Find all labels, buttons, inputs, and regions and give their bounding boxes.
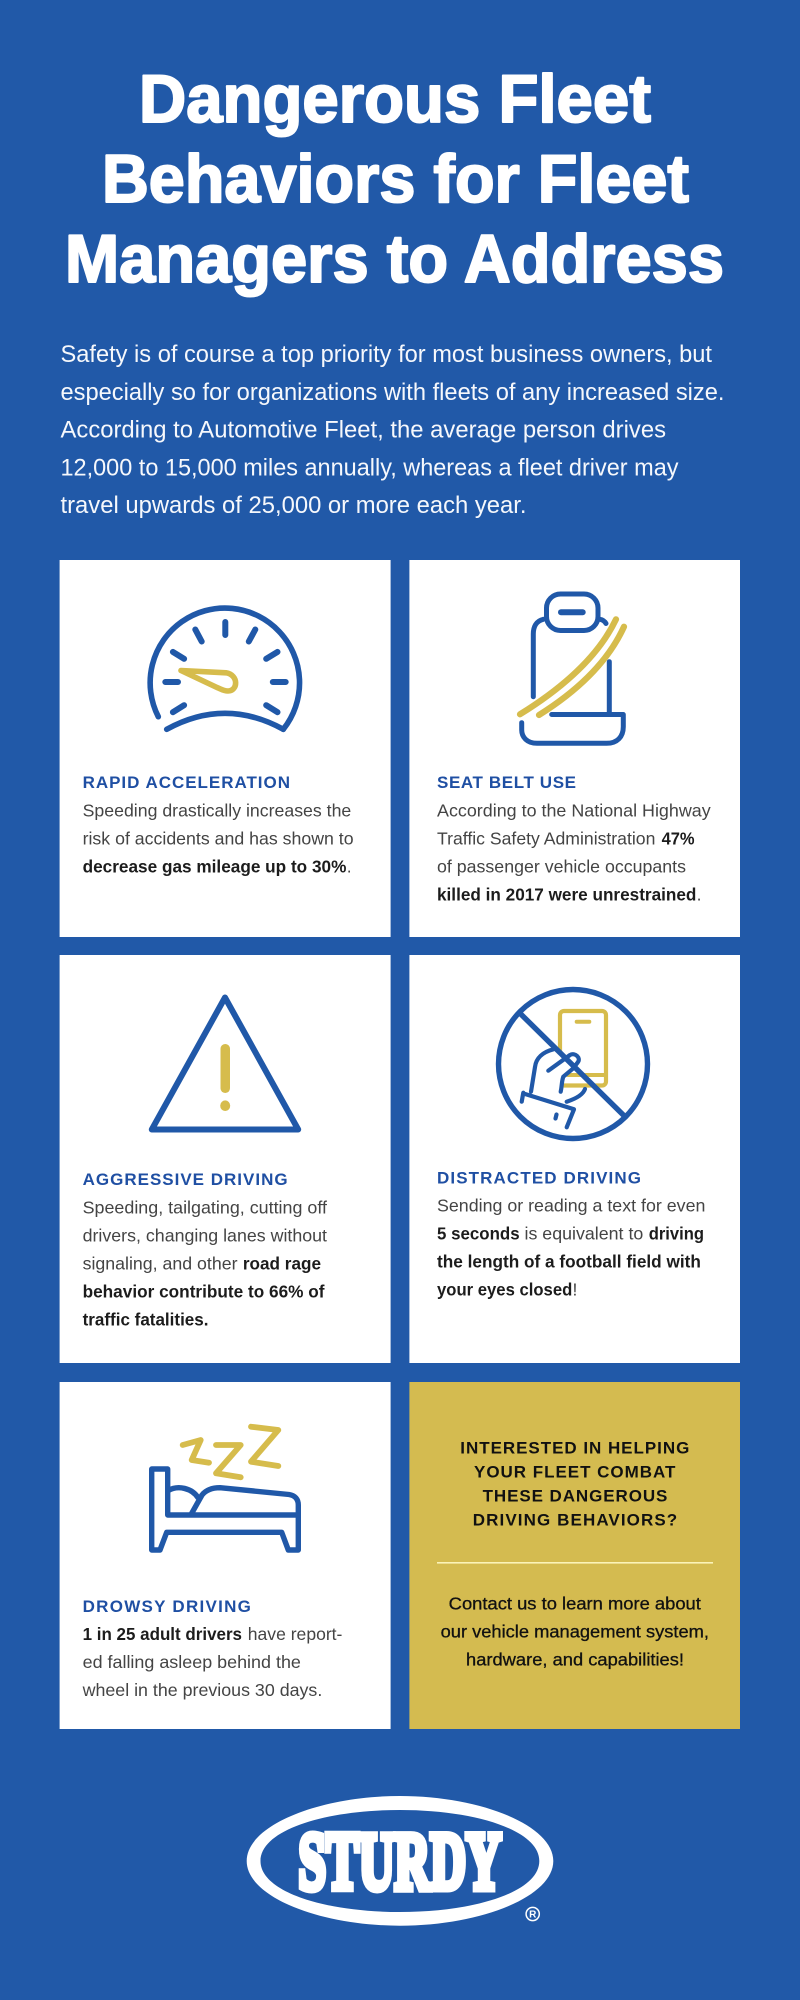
contact text bbox=[441, 1593, 709, 1669]
panel: distracted driving bbox=[409, 955, 740, 1363]
intro text: especially so for organizations with fleets of any increased size. bbox=[60, 379, 724, 406]
call to action heading: THESE DANGEROUS bbox=[483, 1486, 667, 1505]
intro text: Safety is of course a top priority for most business owners, but bbox=[60, 341, 712, 368]
call to action heading bbox=[460, 1438, 689, 1529]
panel: aggressive driving bbox=[60, 955, 391, 1363]
body text: wheel in the previous 30 days. bbox=[82, 1680, 322, 1700]
contact text: our vehicle management system, bbox=[441, 1621, 709, 1641]
icon: bed with zzz bbox=[152, 1427, 298, 1550]
body text bbox=[437, 801, 711, 905]
body text: risk of accidents and has shown to bbox=[83, 829, 354, 849]
body text: ! bbox=[572, 1280, 577, 1300]
logo: Sturdy bbox=[247, 1796, 553, 1926]
body text: 5 seconds bbox=[437, 1224, 520, 1244]
body text: of passenger vehicle occupants bbox=[437, 857, 686, 877]
title: Behaviors for Fleet bbox=[102, 141, 689, 217]
body text: signaling, and other bbox=[83, 1253, 238, 1273]
body text bbox=[437, 1196, 705, 1300]
logo: Sturdy: R bbox=[529, 1910, 537, 1921]
body text: Speeding, tailgating, cutting off bbox=[83, 1197, 327, 1217]
body text: Sending or reading a text for even bbox=[437, 1196, 705, 1216]
body text bbox=[83, 801, 354, 877]
body text: . bbox=[697, 885, 701, 905]
contact text: hardware, and capabilities! bbox=[466, 1649, 684, 1669]
body text: driving bbox=[649, 1224, 704, 1244]
body text: road rage bbox=[243, 1253, 321, 1273]
heading: RAPID ACCELERATION bbox=[83, 773, 290, 792]
panel: drowsy driving bbox=[60, 1382, 391, 1729]
intro text bbox=[60, 341, 724, 519]
contact text: Contact us to learn more about bbox=[449, 1593, 701, 1613]
body text: decrease gas mileage up to 30% bbox=[83, 857, 347, 877]
heading: AGGRESSIVE DRIVING bbox=[83, 1170, 288, 1189]
title: Dangerous Fleet bbox=[139, 61, 651, 137]
call to action heading: DRIVING BEHAVIORS? bbox=[473, 1510, 677, 1529]
body text: your eyes closed bbox=[437, 1280, 572, 1300]
call to action heading: YOUR FLEET COMBAT bbox=[474, 1462, 676, 1481]
body text: the length of a football field with bbox=[437, 1252, 701, 1272]
title: Managers to Address bbox=[65, 221, 724, 297]
panel: call to action bbox=[409, 1382, 740, 1729]
icon: no phone bbox=[498, 990, 648, 1138]
body text: According to the National Highway bbox=[437, 801, 711, 821]
body text: . bbox=[347, 857, 352, 877]
icon: warning triangle bbox=[152, 998, 298, 1130]
body text: 1 in 25 adult drivers bbox=[83, 1624, 242, 1644]
body text bbox=[82, 1624, 343, 1700]
intro text: travel upwards of 25,000 or more each year. bbox=[60, 492, 526, 519]
body text: 47% bbox=[662, 829, 695, 849]
intro text: 12,000 to 15,000 miles annually, whereas a fleet driver may bbox=[60, 454, 678, 481]
body text: Speeding drastically increases the bbox=[83, 801, 351, 821]
call to action heading: INTERESTED IN HELPING bbox=[460, 1438, 689, 1457]
body text: Traffic Safety Administration bbox=[437, 829, 655, 849]
heading: DISTRACTED DRIVING bbox=[437, 1168, 641, 1187]
icon: seat with belt bbox=[520, 594, 624, 743]
body text bbox=[83, 1197, 327, 1329]
logo: Sturdy: STURDY bbox=[298, 1815, 502, 1906]
body text: ed falling asleep behind the bbox=[83, 1652, 301, 1672]
heading: DROWSY DRIVING bbox=[83, 1597, 251, 1616]
title bbox=[65, 61, 724, 297]
icon: speedometer bbox=[150, 608, 300, 729]
heading: SEAT BELT USE bbox=[437, 773, 576, 792]
body text: traffic fatalities. bbox=[83, 1309, 208, 1329]
panel: rapid acceleration bbox=[60, 560, 391, 937]
panel: seat belt use bbox=[409, 560, 740, 937]
body text: behavior contribute to 66% of bbox=[83, 1281, 325, 1301]
body text: drivers, changing lanes without bbox=[83, 1225, 327, 1245]
body text: killed in 2017 were unrestrained bbox=[437, 885, 696, 905]
body text: is equivalent to bbox=[524, 1224, 643, 1244]
intro text: According to Automotive Fleet, the average person drives bbox=[60, 417, 666, 444]
body text: have report- bbox=[248, 1624, 343, 1644]
